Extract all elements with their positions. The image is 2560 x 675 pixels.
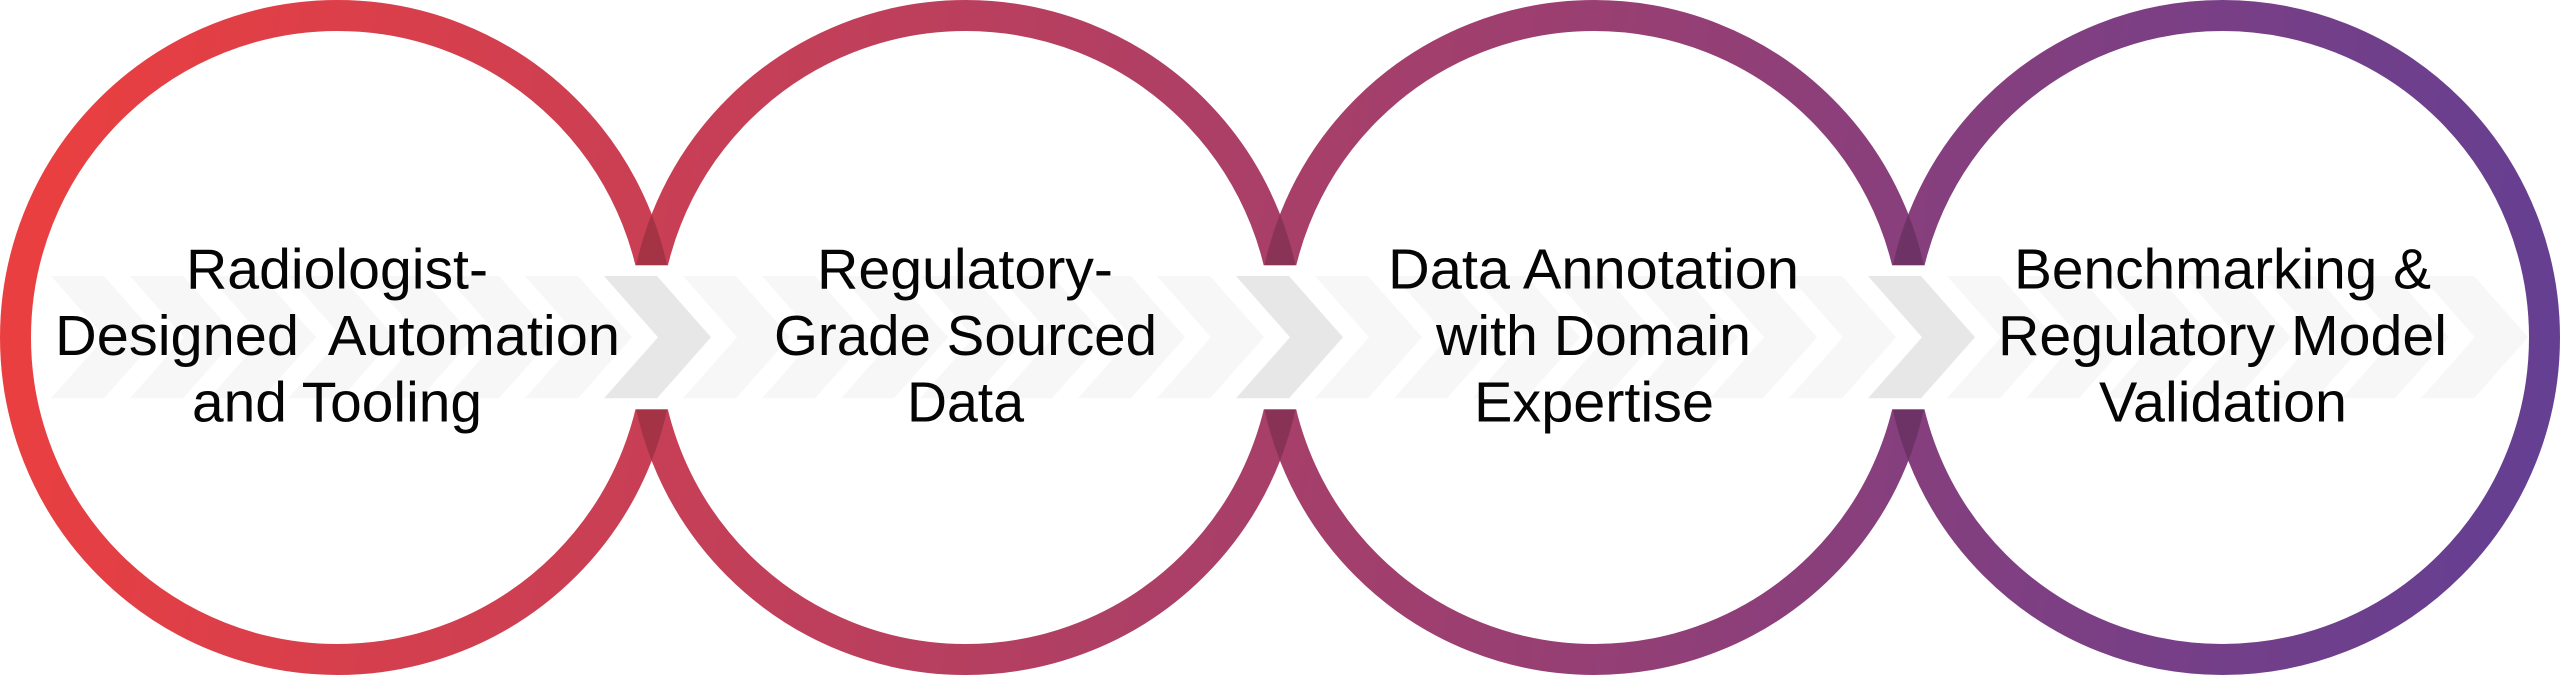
label: Regulatory-Grade Sourced Data bbox=[774, 237, 1157, 435]
label: Data Annotation with Domain Expertise: Data Annotation bbox=[1388, 237, 1799, 301]
label: Regulatory-Grade Sourced Data: Regulatory- bbox=[817, 237, 1113, 301]
label: Benchmarking & Regulatory Model Validation bbox=[1998, 237, 2447, 435]
ring 4 bbox=[1900, 16, 2544, 660]
label: Benchmarking & Regulatory Model Validation: Benchmarking & bbox=[2014, 237, 2431, 301]
label: Regulatory-Grade Sourced Data: Data bbox=[907, 371, 1024, 435]
ring 2 bbox=[644, 16, 1288, 660]
label: Regulatory-Grade Sourced Data: Grade Sourced bbox=[774, 304, 1157, 368]
ring overlap 3-4 bbox=[1892, 214, 1924, 460]
label: Radiologist-Designed Automation and Tooling: Radiologist- bbox=[186, 237, 488, 301]
label: Radiologist-Designed Automation and Tooling: and Tooling bbox=[192, 371, 482, 435]
ring 1 bbox=[16, 16, 660, 660]
ring 3 bbox=[1272, 16, 1916, 660]
arrow band: light chevrons bbox=[51, 276, 2528, 398]
label: Data Annotation with Domain Expertise bbox=[1388, 237, 1799, 435]
ring overlap 2-3 bbox=[1264, 214, 1296, 460]
arrow: dark chevron between circles 3 and 4 bbox=[1868, 276, 1975, 398]
ring overlap 1-2 bbox=[636, 214, 667, 460]
label: Data Annotation with Domain Expertise: Expertise bbox=[1474, 371, 1714, 435]
label: Radiologist-Designed Automation and Tooling bbox=[55, 237, 620, 435]
label: Radiologist-Designed Automation and Tooling: Designed Automation bbox=[55, 304, 620, 368]
label: Benchmarking & Regulatory Model Validation: Validation bbox=[2099, 371, 2347, 435]
label: Data Annotation with Domain Expertise: with Domain bbox=[1435, 304, 1751, 368]
arrow: dark chevron between circles 2 and 3 bbox=[1236, 276, 1343, 398]
arrow: dark chevron between circles 1 and 2 bbox=[604, 276, 711, 398]
label: Benchmarking & Regulatory Model Validation: Regulatory Model bbox=[1998, 304, 2447, 368]
